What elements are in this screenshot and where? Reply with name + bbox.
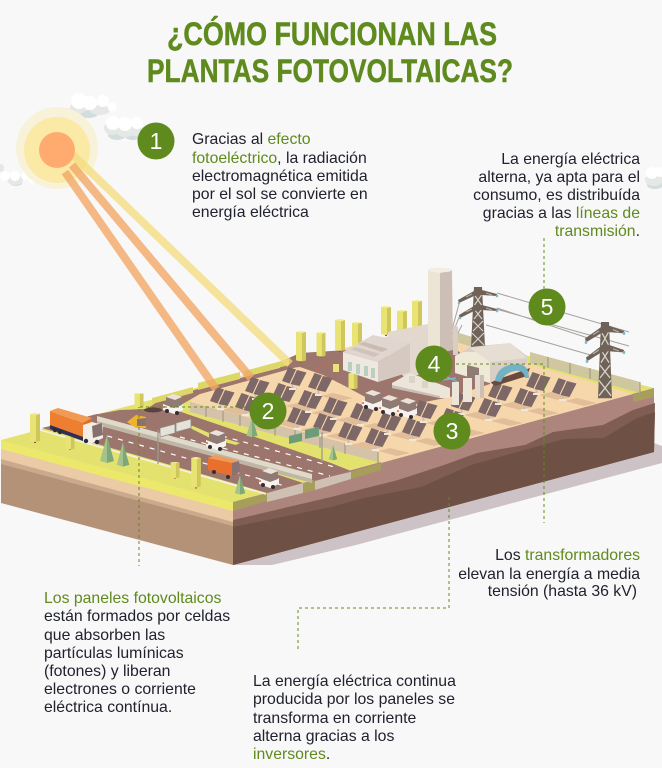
text: step 2 panels: electrones o corriente	[44, 681, 196, 698]
text: step 1: por el sol se convierte en	[192, 186, 368, 203]
text: step 4 transformers: tensión (hasta 36 kV)	[488, 583, 637, 600]
isometric plant block	[1, 268, 655, 565]
step badge 5: 5	[541, 294, 553, 320]
step badge 5	[528, 288, 566, 326]
text: step 2 panels	[44, 590, 230, 716]
grass top surface	[1, 328, 654, 502]
icon: clouds	[0, 93, 662, 189]
text: step 1	[192, 131, 368, 221]
text: step 2 panels: partículas lumínicas	[44, 645, 184, 662]
inverter tanks	[452, 375, 484, 405]
text: step 1: fotoeléctrico, la radiación	[192, 150, 367, 167]
leader lines	[139, 238, 544, 650]
text: step 2 panels: que absorben las	[44, 627, 165, 644]
transmission tower left	[458, 287, 498, 347]
factory	[343, 324, 430, 382]
text: step 5: La energía eléctrica	[501, 151, 640, 168]
step badge 3	[434, 412, 470, 450]
text: step 3 inverters: La energía eléctrica continua	[253, 673, 456, 690]
step badge 2	[250, 392, 286, 430]
step badge 4: 4	[428, 351, 441, 377]
text: step 3 inverters	[253, 673, 456, 763]
brown factory yard	[280, 345, 490, 412]
road vehicles	[127, 390, 417, 489]
traffic cones	[317, 364, 339, 372]
icon: sun	[16, 107, 290, 389]
text: step 4 transformers	[458, 547, 640, 600]
solar panel shadows	[221, 392, 597, 456]
text: step 4 transformers: elevan la energía a media	[458, 566, 640, 583]
text: step 2 panels: Los paneles fotovoltaicos	[44, 590, 221, 607]
text: step 5: alterna, ya apta para el	[478, 169, 640, 186]
text: step 3 inverters: alterna gracias a los	[253, 728, 394, 745]
text: step 2 panels: están formados por celdas	[44, 608, 230, 625]
transmission tower right	[585, 322, 625, 398]
chimney	[428, 268, 458, 355]
road signs	[158, 419, 322, 464]
text: step 3 inverters: inversores.	[253, 746, 330, 763]
conifer trees	[100, 417, 337, 495]
orange truck	[50, 408, 103, 444]
step badge 2: 2	[262, 398, 274, 424]
step badge 1: 1	[150, 128, 162, 154]
text: step 5: consumo, es distribuída	[473, 187, 640, 204]
step badge 4	[416, 346, 452, 382]
title	[147, 16, 513, 89]
brown service road	[148, 364, 297, 410]
text: step 5: transmisión.	[555, 223, 640, 240]
concrete platform	[392, 373, 458, 398]
sand solar field	[190, 328, 633, 463]
yellow trees	[30, 300, 422, 488]
solar panels	[210, 367, 576, 451]
text: step 3 inverters: producida por los paneles se	[253, 691, 455, 708]
hedges	[152, 359, 289, 404]
blue arch transformer	[495, 364, 529, 382]
hangar	[455, 343, 530, 386]
power lines	[452, 293, 629, 356]
grass edge sides	[233, 388, 654, 511]
text: step 5	[473, 151, 640, 240]
ground shadow	[233, 443, 662, 565]
text: step 2 panels: (fotones) y liberan	[44, 663, 170, 680]
title: ¿CÓMO FUNCIONAN LAS	[167, 16, 497, 52]
text: step 1: electromagnética emitida	[192, 168, 368, 185]
left soil face	[1, 440, 233, 565]
text: step 4 transformers: Los transformadores	[495, 547, 640, 564]
step badge 1	[138, 122, 174, 160]
text: step 3 inverters: transforma en corriente	[253, 710, 417, 727]
right soil face	[233, 388, 655, 565]
highway	[40, 408, 351, 494]
text: step 1: Gracias al efecto	[192, 131, 311, 148]
text: step 2 panels: eléctrica contínua.	[44, 699, 172, 716]
text: step 5: gracias a las líneas de	[483, 205, 640, 222]
text: step 1: energía eléctrica	[192, 204, 309, 221]
title: PLANTAS FOTOVOLTAICAS?	[147, 53, 513, 89]
step badge 3: 3	[446, 418, 458, 444]
fence	[190, 332, 640, 463]
